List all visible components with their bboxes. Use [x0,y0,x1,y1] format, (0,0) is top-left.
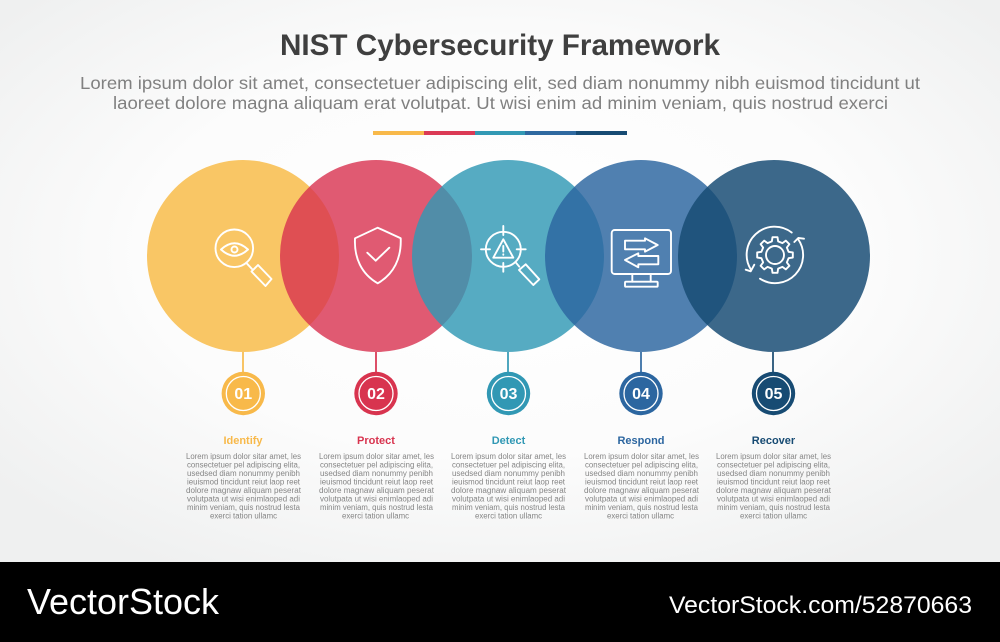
column: Respond [584,435,700,520]
badge 01: 01 [234,386,252,403]
column: Detect: ieuismod tincidunt reiut laop reet [452,478,566,486]
column: Detect: volutpata ut wisi enimlaoped adi [452,494,565,504]
badge 05: 05 [765,386,782,403]
column: Protect: consectetuer pel adipiscing elita, [320,460,433,470]
column: Respond: minim veniam, quis nostrud lesta [585,503,699,512]
icon: shield [355,228,401,283]
column: Detect: usedsed diam nonummy penibh [452,469,565,478]
column: Identify: minim veniam, quis nostrud lesta [187,503,301,512]
column: Detect: dolore magnaw aliquam peserat [451,486,567,495]
column: Respond: volutpata ut wisi enimlaoped adi [585,494,698,504]
column: Recover: exerci tation ullamc [740,512,807,520]
badge 03 [487,372,530,415]
badge 02 [354,372,398,415]
column: Protect: Protect [357,435,395,447]
column: Recover: usedsed diam nonummy penibh [717,469,830,478]
column: Protect: exerci tation ullamc [342,512,409,520]
connector lines [243,352,773,373]
column: Respond: dolore magnaw aliquam peserat [584,486,700,495]
column: Protect: dolore magnaw aliquam peserat [319,486,435,495]
column: Identify: usedsed diam nonummy penibh [187,469,300,478]
colour divider bar [373,131,627,135]
column: Respond: Respond [617,435,665,447]
column: Identify: consectetuer pel adipiscing elita, [187,460,300,470]
column: Protect: minim veniam, quis nostrud lesta [320,503,434,512]
title: NIST Cybersecurity Framework [280,29,721,62]
badge 04 [619,372,663,415]
column: Identify: volutpata ut wisi enimlaoped adi [187,494,300,504]
column: Respond: Lorem ipsum dolor sitar amet, les [584,452,699,461]
column: Detect: consectetuer pel adipiscing elita, [452,460,565,470]
icon: warning target magnifier [481,226,539,285]
column: Identify: exerci tation ullamc [210,512,277,520]
column: Respond: usedsed diam nonummy penibh [585,469,698,478]
column: Identify: Identify [223,435,263,447]
column: Recover: Recover [752,435,796,447]
column: Recover [716,435,832,520]
column: Detect: exerci tation ullamc [475,512,542,520]
column: Respond: ieuismod tincidunt reiut laop reet [585,478,699,486]
column: Protect: volutpata ut wisi enimlaoped adi [320,494,433,504]
column: Recover: volutpata ut wisi enimlaoped adi [717,494,830,504]
icon: gear with cycle arrows [746,227,804,283]
column: Respond: exerci tation ullamc [607,512,674,520]
subtitle: laoreet dolore magna aliquam erat volutpat. Ut wisi enim ad minim veniam, quis nostrud exerci [113,93,888,113]
column: Detect: Detect [492,435,526,447]
column: Respond: consectetuer pel adipiscing elita, [585,460,698,470]
icon: monitor with arrows [612,230,671,287]
column: Detect [451,435,567,520]
column: Identify: Lorem ipsum dolor sitar amet, les [186,452,301,461]
icon: eye magnifier [216,230,272,286]
column: Protect [319,435,435,520]
footer logo: VectorStock [27,581,220,622]
column: Identify [186,435,302,520]
footer image id: VectorStock.com/52870663 [669,592,972,619]
badge 04: 04 [632,386,650,403]
column: Identify: dolore magnaw aliquam peserat [186,486,302,495]
badge 05 [752,372,795,415]
badge 02: 02 [367,386,385,403]
column: Protect: usedsed diam nonummy penibh [320,469,433,478]
column: Protect: ieuismod tincidunt reiut laop reet [320,478,434,486]
subtitle: Lorem ipsum dolor sit amet, consectetuer adipiscing elit, sed diam nonummy nibh euismod tincidunt ut [80,73,920,93]
column: Recover: Lorem ipsum dolor sitar amet, les [716,452,831,461]
column: Protect: Lorem ipsum dolor sitar amet, les [319,452,434,461]
column: Recover: dolore magnaw aliquam peserat [716,486,832,495]
column: Recover: ieuismod tincidunt reiut laop reet [717,478,831,486]
footer bar [0,562,1000,642]
subtitle [80,73,920,113]
column: Identify: ieuismod tincidunt reiut laop reet [187,478,301,486]
column: Detect: Lorem ipsum dolor sitar amet, les [451,452,566,461]
badge 03: 03 [500,386,518,403]
column: Recover: consectetuer pel adipiscing elita, [717,460,830,470]
column: Detect: minim veniam, quis nostrud lesta [452,503,566,512]
overlapping circles [147,160,870,352]
badge 01 [222,372,265,415]
column: Recover: minim veniam, quis nostrud lesta [717,503,831,512]
